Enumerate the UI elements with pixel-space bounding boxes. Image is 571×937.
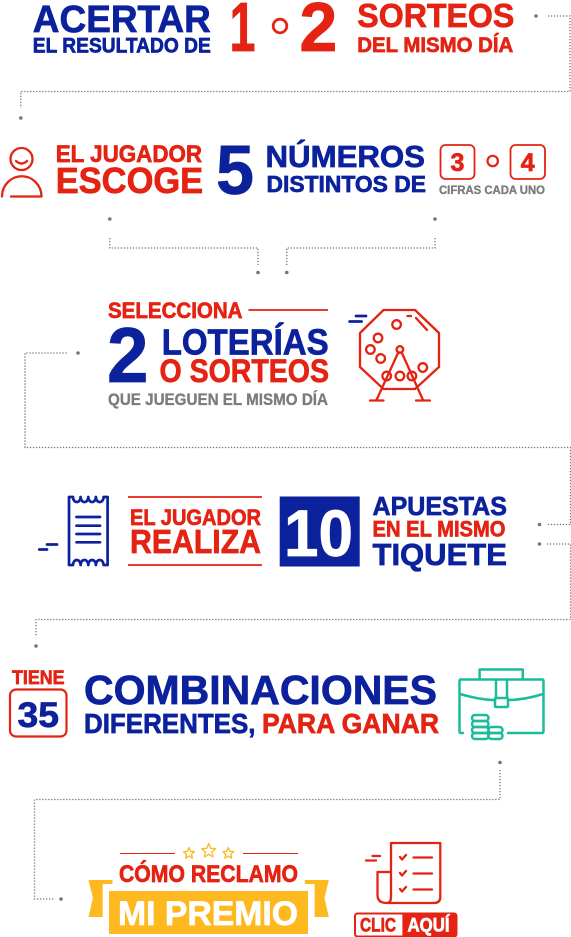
badge: tiene 35: TIENE: [12, 668, 64, 689]
heading: combinaciones diferentes para ganar: PARA GANAR: [262, 708, 439, 739]
connector: row 2 to row 3: [108, 217, 437, 274]
heading: acertar el resultado: [33, 0, 211, 58]
connector: row 3 to row 4: [25, 351, 570, 526]
text: numeros distintos de: NÚMEROS: [266, 138, 425, 174]
heading: combinaciones diferentes para ganar: [84, 667, 439, 739]
numbers: 1 o 2: [230, 0, 337, 66]
heading: acertar el resultado: EL RESULTADO DE: [33, 34, 211, 58]
text: numeros distintos de: DISTINTOS DE: [266, 171, 426, 197]
text: apuestas en el mismo tiquete: APUESTAS: [372, 491, 507, 521]
connector: row 4 to row 5: [34, 542, 570, 648]
number boxes: 3 o 4 cifras: 4: [521, 149, 535, 177]
heading: selecciona 2 loterias o sorteos: QUE JUEGUEN EL MISMO DÍA: [108, 390, 328, 409]
banner: como reclamo mi premio: MI PREMIO: [118, 895, 298, 933]
text: apuestas en el mismo tiquete: [372, 491, 507, 572]
badge: 10: 10: [284, 496, 353, 570]
text: el jugador realiza: REALIZA: [130, 523, 261, 560]
icon: checklist document: [366, 843, 440, 903]
button: clic aqui: CLIC: [360, 916, 396, 936]
text: el jugador escoge: EL JUGADOR: [56, 141, 202, 168]
icon: lottery drum: [350, 310, 439, 400]
text: el jugador realiza: EL JUGADOR: [130, 505, 261, 530]
number boxes: 3 o 4 cifras: [439, 145, 545, 197]
banner: como reclamo mi premio: [88, 860, 329, 934]
heading: acertar el resultado: ACERTAR: [33, 0, 211, 41]
badge: tiene 35: 35: [18, 696, 59, 735]
number boxes: 3 o 4 cifras: CIFRAS CADA UNO: [439, 183, 545, 197]
text: el jugador escoge: ESCOGE: [56, 160, 203, 201]
text: el jugador escoge: [56, 141, 203, 201]
heading: selecciona 2 loterias o sorteos: SELECCIONA: [108, 298, 243, 323]
number boxes: 3 o 4 cifras: 3: [451, 149, 464, 177]
icon: person: [2, 148, 42, 196]
number: 5: 5: [216, 131, 254, 209]
heading: selecciona 2 loterias o sorteos: 2: [107, 311, 148, 399]
heading: combinaciones diferentes para ganar: DIFERENTES,: [84, 708, 256, 739]
text: numeros distintos de: [266, 138, 426, 197]
text: apuestas en el mismo tiquete: TIQUETE: [372, 537, 507, 572]
heading: sorteos del mismo dia: DEL MISMO DÍA: [357, 34, 513, 57]
stars and rules: [120, 844, 298, 858]
heading: combinaciones diferentes para ganar: COMBINACIONES: [84, 667, 437, 713]
banner: como reclamo mi premio: CÓMO RECLAMO: [119, 860, 298, 888]
connector: row 5 to row 6: [34, 761, 502, 901]
icon: ticket: [39, 497, 108, 565]
heading: selecciona 2 loterias o sorteos: LOTERÍAS: [162, 322, 329, 362]
badge: tiene 35: [10, 668, 66, 736]
icon: briefcase with coins: [460, 670, 544, 739]
heading: selecciona 2 loterias o sorteos: O SORTEOS: [160, 353, 329, 389]
button: clic aqui: AQUÍ: [408, 914, 450, 936]
text: apuestas en el mismo tiquete: EN EL MISMO: [372, 516, 506, 542]
heading: selecciona 2 loterias o sorteos: [107, 298, 329, 409]
text: el jugador realiza: [128, 497, 262, 565]
connector: row 1 to row 2: [19, 14, 570, 120]
button: clic aqui: [355, 913, 457, 937]
heading: sorteos del mismo dia: [357, 0, 514, 57]
